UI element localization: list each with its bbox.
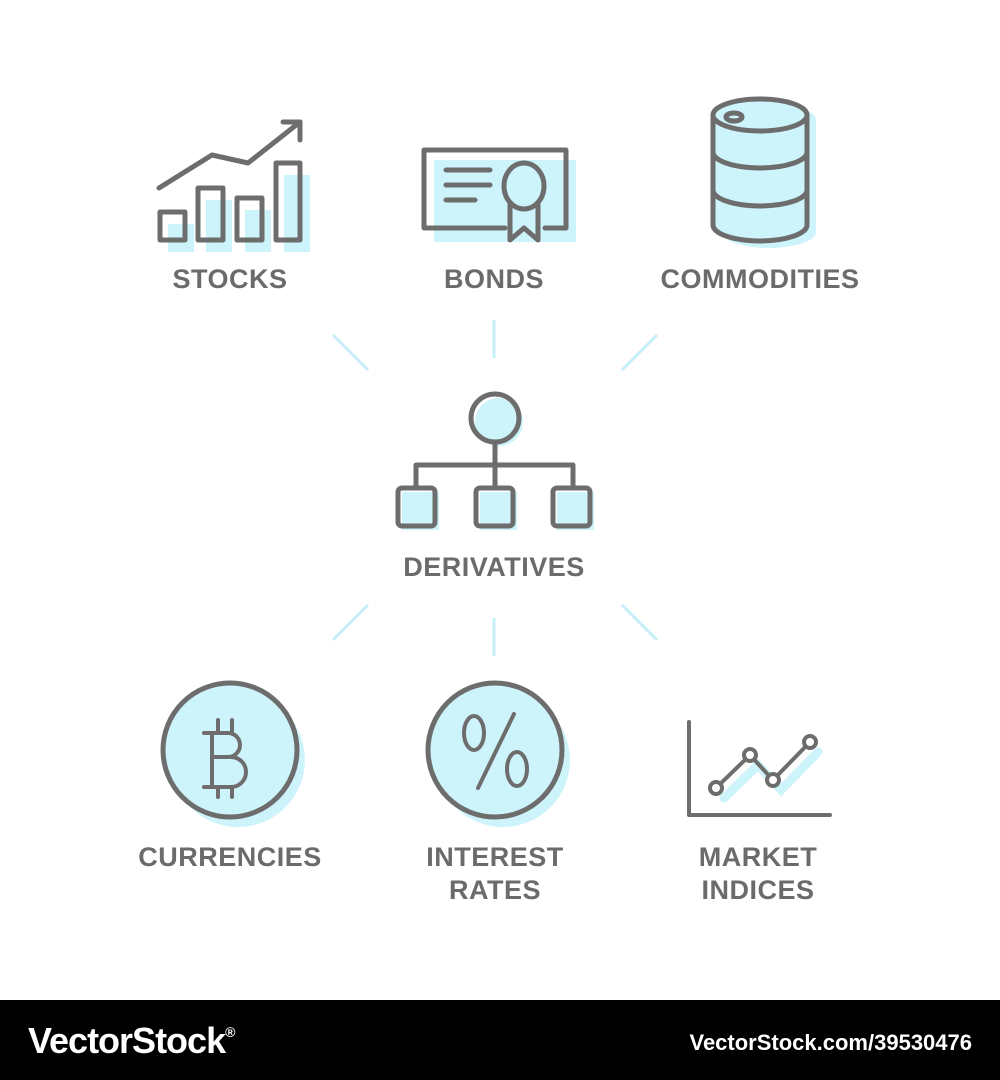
- connector rays: [333, 320, 657, 656]
- label: commodities: COMMODITIES: [660, 264, 860, 294]
- icon: stocks: [159, 122, 310, 252]
- label: currencies: CURRENCIES: [138, 842, 322, 872]
- label: bonds: BONDS: [444, 264, 544, 294]
- icon: derivatives hierarchy: [398, 394, 594, 530]
- label: interest rates: INTEREST: [426, 842, 564, 872]
- icon: interest rates percent: [428, 683, 570, 827]
- label: stocks: STOCKS: [172, 264, 288, 294]
- footer bar: VectorStock: [28, 1020, 225, 1061]
- label: market indices: MARKET: [699, 842, 817, 872]
- label: derivatives: DERIVATIVES: [403, 552, 585, 582]
- footer bar: VectorStock.com/39530476: [689, 1030, 972, 1055]
- footer bar: ®: [225, 1024, 236, 1040]
- icon: market indices: [689, 722, 830, 815]
- icon: commodities barrel: [713, 99, 816, 248]
- icon: bonds: [424, 150, 576, 242]
- footer bar: [0, 1000, 1000, 1080]
- label: interest rates: RATES: [449, 875, 541, 905]
- label: market indices: INDICES: [701, 875, 815, 905]
- icon: currencies bitcoin: [163, 683, 305, 827]
